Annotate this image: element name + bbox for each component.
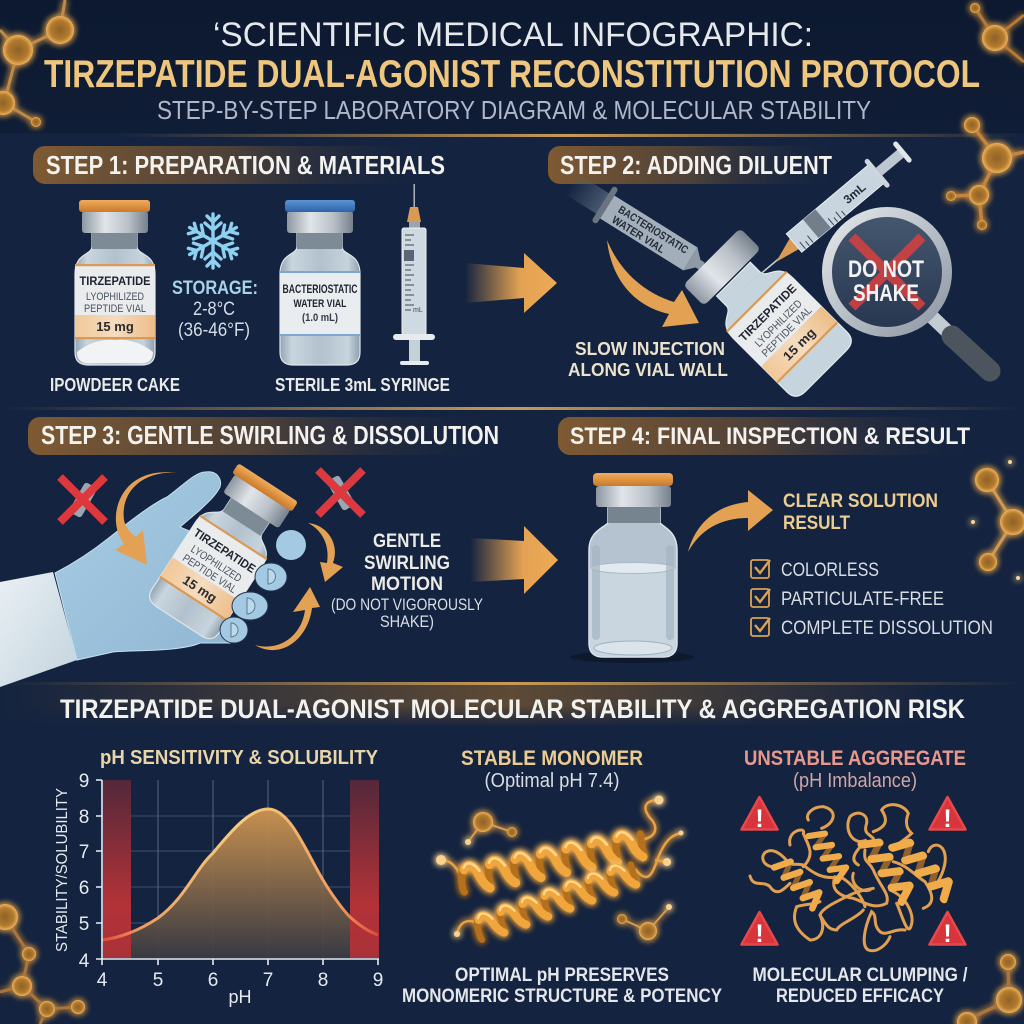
- main syringe: [745, 137, 916, 287]
- warning bottom right: !: [943, 920, 952, 948]
- decorative molecule: bottom right: [957, 954, 1022, 1024]
- hand held vial: PEPTIDE VIAL: [180, 552, 239, 596]
- arrow: step 1 to step 2: [465, 253, 557, 313]
- y axis labels: [79, 771, 90, 972]
- slow injection arrow: [607, 240, 699, 327]
- clear solution result text: CLEAR SOLUTION: [783, 491, 938, 512]
- title block: ‘SCIENTIFIC MEDICAL INFOGRAPHIC:: [213, 16, 813, 54]
- warning top left: !: [755, 805, 764, 833]
- small molecule upper: [465, 812, 517, 845]
- swirl arrow right bottom: [255, 587, 320, 650]
- stable caption: [402, 965, 722, 1007]
- y axis labels: 5: [79, 914, 89, 935]
- sterile syringe: [393, 184, 435, 365]
- panel: step 1 preparation and materials: [33, 146, 450, 395]
- chart title: pH SENSITIVITY & SOLUBILITY: [100, 747, 379, 769]
- stable monomer heading: STABLE MONOMER: [461, 747, 643, 770]
- material captions: IPOWDEER CAKE: [50, 375, 180, 395]
- title block: STEP-BY-STEP LABORATORY DIAGRAM & MOLECULAR STABILITY: [157, 95, 871, 125]
- magnifier do not shake: SHAKE: [853, 280, 919, 307]
- unstable heading: [744, 747, 966, 792]
- checklist: [751, 560, 993, 639]
- warning triangles: [742, 797, 966, 948]
- panel: stable monomer: [402, 747, 722, 1007]
- diluent syringe: BACTERIOSTATIC: [616, 204, 690, 257]
- x axis labels: 9: [373, 970, 383, 991]
- slow injection text: ALONG VIAL WALL: [568, 360, 728, 380]
- clear solution vial: [570, 473, 694, 663]
- decorative molecule: top left: [0, 0, 74, 127]
- step 1 heading: [33, 146, 445, 184]
- axis titles: STABILITY/SOLUBILITY: [54, 788, 71, 952]
- rotated tirzepatide vial: 15 mg: [780, 325, 818, 363]
- swirling motion text: (DO NOT VIGOROUSLY: [331, 595, 483, 614]
- x axis labels: 7: [263, 970, 273, 991]
- red unstable zones: [103, 780, 379, 958]
- decorative molecule: right middle: [971, 460, 1024, 580]
- swirling motion text: SHAKE): [380, 612, 434, 631]
- hand held vial: TIRZEPATIDE: [191, 526, 258, 576]
- swirling motion text: MOTION: [371, 574, 443, 595]
- magnifier do not shake: DO NOT: [848, 256, 924, 283]
- unstable caption: MOLECULAR CLUMPING /: [752, 965, 968, 986]
- swirl arrow left: [115, 472, 177, 565]
- arrow: step 3 to step 4: [470, 526, 558, 594]
- storage text: STORAGE:: [172, 278, 258, 299]
- panel: step 2 adding diluent: [548, 137, 990, 401]
- hand held vial: [145, 461, 302, 643]
- unstable caption: REDUCED EFFICACY: [776, 986, 944, 1007]
- warning top right: !: [943, 805, 952, 833]
- bell curve: [102, 809, 378, 958]
- helix one: [436, 796, 664, 893]
- unstable heading: UNSTABLE AGGREGATE: [744, 747, 966, 770]
- slow injection text: SLOW INJECTION: [575, 339, 725, 359]
- small molecule lower: [617, 904, 672, 940]
- tirzepatide vial: LYOPHILIZED: [86, 291, 144, 303]
- material captions: STERILE 3mL SYRINGE: [275, 375, 450, 395]
- helix two: [454, 830, 684, 941]
- y axis labels: 8: [79, 807, 89, 828]
- hand held vial: 15 mg: [180, 572, 220, 605]
- tirzepatide vial: PEPTIDE VIAL: [84, 303, 146, 315]
- swirling motion text: SWIRLING: [364, 553, 450, 574]
- storage text: (36-46°F): [178, 320, 250, 341]
- warning bottom right: [930, 912, 966, 948]
- icon: crossed out shaking vial right: [318, 470, 363, 515]
- stable caption: OPTIMAL pH PRESERVES: [455, 965, 669, 986]
- slow injection text: [568, 339, 728, 380]
- bacteriostatic water vial: (1.0 mL): [302, 312, 338, 324]
- step 3 heading: STEP 3: GENTLE SWIRLING & DISSOLUTION: [41, 420, 499, 450]
- y axis labels: 9: [79, 771, 89, 792]
- gripping fingers: [220, 563, 287, 643]
- decorative molecule: top right: [970, 3, 1024, 62]
- bacteriostatic water vial: BACTERIOSTATIC: [282, 284, 358, 296]
- axes: [96, 780, 379, 965]
- storage text: [172, 278, 258, 341]
- step 1 heading: STEP 1: PREPARATION & MATERIALS: [46, 150, 445, 180]
- hand held vial: LYOPHILIZED: [188, 543, 244, 585]
- rotated tirzepatide vial: PEPTIDE VIAL: [760, 305, 814, 359]
- x axis labels: 8: [318, 970, 328, 991]
- panel: step 4 final inspection: [558, 417, 993, 663]
- y axis labels: 4: [79, 951, 90, 972]
- check: complete dissolution: COMPLETE DISSOLUTION: [781, 618, 993, 639]
- stable caption: MONOMERIC STRUCTURE & POTENCY: [402, 986, 722, 1007]
- panel: unstable aggregate: [742, 747, 968, 1007]
- unstable heading: (pH Imbalance): [793, 770, 917, 792]
- y axis labels: 7: [79, 842, 89, 863]
- tirzepatide vial: [75, 200, 155, 365]
- section heading: molecular stability: [0, 685, 1024, 727]
- swirling motion text: GENTLE: [373, 531, 441, 552]
- x axis labels: 5: [153, 970, 163, 991]
- sterile syringe: mL: [413, 307, 423, 314]
- decorative molecule: bottom left: [0, 904, 85, 1024]
- warning top left: [742, 797, 778, 833]
- storage text: 2-8°C: [193, 299, 235, 320]
- warning bottom left: [742, 912, 778, 948]
- result arrow: [688, 490, 773, 552]
- y axis labels: 6: [79, 878, 89, 899]
- axis titles: [54, 788, 252, 1007]
- x axis labels: 6: [208, 970, 218, 991]
- step 2 heading: STEP 2: ADDING DILUENT: [560, 150, 832, 180]
- bacteriostatic water vial: [280, 200, 360, 365]
- material captions: [50, 375, 450, 395]
- decorative molecule: right under header: [946, 117, 1024, 230]
- magnifier do not shake: [827, 212, 990, 371]
- swirling motion text: [331, 531, 483, 631]
- bacteriostatic water vial: WATER VIAL: [294, 298, 347, 310]
- check: particulate free: PARTICULATE-FREE: [781, 589, 944, 610]
- warning top right: [930, 797, 966, 833]
- panel: step 3 gentle swirling: [0, 417, 499, 687]
- tirzepatide vial: 15 mg: [96, 319, 134, 334]
- gloved hand with lab sleeve: [0, 472, 306, 687]
- stable monomer heading: [461, 747, 643, 792]
- icon: snowflake: [186, 214, 240, 268]
- panel: pH sensitivity chart: [54, 747, 383, 1007]
- diluent syringe: [560, 166, 719, 287]
- swirl arrow right top: [308, 523, 343, 582]
- x axis labels: [97, 970, 383, 991]
- step 3 heading: [28, 417, 499, 455]
- warning bottom left: !: [755, 920, 764, 948]
- check: colorless: [751, 560, 879, 581]
- check: colorless: COLORLESS: [781, 560, 879, 581]
- title block: [44, 16, 980, 125]
- clear solution result text: [783, 491, 938, 534]
- step 2 heading: [548, 146, 838, 184]
- x axis labels: 4: [97, 970, 108, 991]
- rotated tirzepatide vial: TIRZEPATIDE: [736, 281, 799, 344]
- step 4 heading: [558, 417, 978, 455]
- main syringe: 3mL: [841, 180, 869, 207]
- tangled aggregate: [750, 805, 955, 951]
- clear solution result text: RESULT: [783, 513, 850, 534]
- icon: crossed out shaking vial left: [60, 477, 105, 522]
- rotated tirzepatide vial: [682, 227, 856, 401]
- stable monomer heading: (Optimal pH 7.4): [484, 770, 620, 792]
- rotated tirzepatide vial: LYOPHILIZED: [753, 298, 805, 350]
- unstable caption: [752, 965, 968, 1007]
- axis titles: pH: [228, 987, 252, 1007]
- diluent syringe: WATER VIAL: [609, 214, 667, 256]
- tirzepatide vial: TIRZEPATIDE: [80, 274, 150, 288]
- step 4 heading: STEP 4: FINAL INSPECTION & RESULT: [570, 423, 970, 450]
